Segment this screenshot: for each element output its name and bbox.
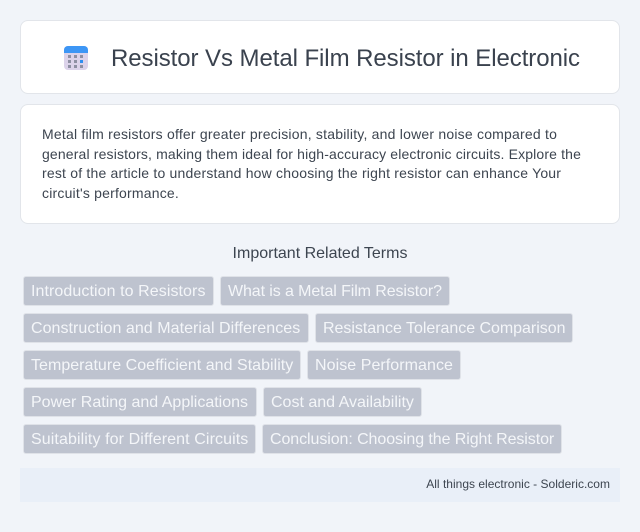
tag: Temperature Coefficient and Stability: Temperature Coefficient and Stability xyxy=(31,357,293,374)
tag: Introduction to Resistors: Introduction to Resistors xyxy=(31,283,206,300)
intro text xyxy=(42,126,581,201)
tag: Suitability for Different Circuits: Suitability for Different Circuits xyxy=(31,431,248,448)
header panel xyxy=(20,20,620,94)
footer text: All things electronic - Solderic.com xyxy=(426,477,610,491)
tag list xyxy=(23,276,573,454)
section heading: Important Related Terms xyxy=(233,245,407,262)
tag: Cost and Availability xyxy=(263,387,422,417)
tag: Power Rating and Applications xyxy=(23,387,257,417)
icon: calendar xyxy=(64,46,88,70)
tag: Conclusion: Choosing the Right Resistor: Conclusion: Choosing the Right Resistor xyxy=(270,431,554,448)
tag: Introduction to Resistors xyxy=(23,276,214,306)
tag: Noise Performance: Noise Performance xyxy=(315,357,453,374)
tag: Resistance Tolerance Comparison xyxy=(315,313,573,343)
intro text: circuit's performance. xyxy=(42,185,179,201)
footer bar xyxy=(20,468,620,502)
intro text: rest of the article to understand how choosing the right resistor can enhance Your xyxy=(42,165,561,181)
tag: Construction and Material Differences xyxy=(23,313,309,343)
intro panel xyxy=(20,104,620,224)
tag: Power Rating and Applications: Power Rating and Applications xyxy=(31,394,248,411)
tag: Noise Performance xyxy=(307,350,461,380)
title: Resistor Vs Metal Film Resistor in Electronic xyxy=(111,45,580,72)
intro text: Metal film resistors offer greater precision, stability, and lower noise compared to xyxy=(42,126,557,142)
tag: Conclusion: Choosing the Right Resistor xyxy=(262,424,562,454)
tag: Temperature Coefficient and Stability xyxy=(23,350,301,380)
tag: Suitability for Different Circuits xyxy=(23,424,256,454)
tag: Construction and Material Differences: Construction and Material Differences xyxy=(31,320,300,337)
tag: Resistance Tolerance Comparison: Resistance Tolerance Comparison xyxy=(323,320,565,337)
intro text: general resistors, making them ideal for high-accuracy electronic circuits. Explore the xyxy=(42,146,581,162)
tag: What is a Metal Film Resistor? xyxy=(220,276,450,306)
tag: Cost and Availability: Cost and Availability xyxy=(271,394,414,411)
tag: What is a Metal Film Resistor?: What is a Metal Film Resistor? xyxy=(228,283,442,300)
